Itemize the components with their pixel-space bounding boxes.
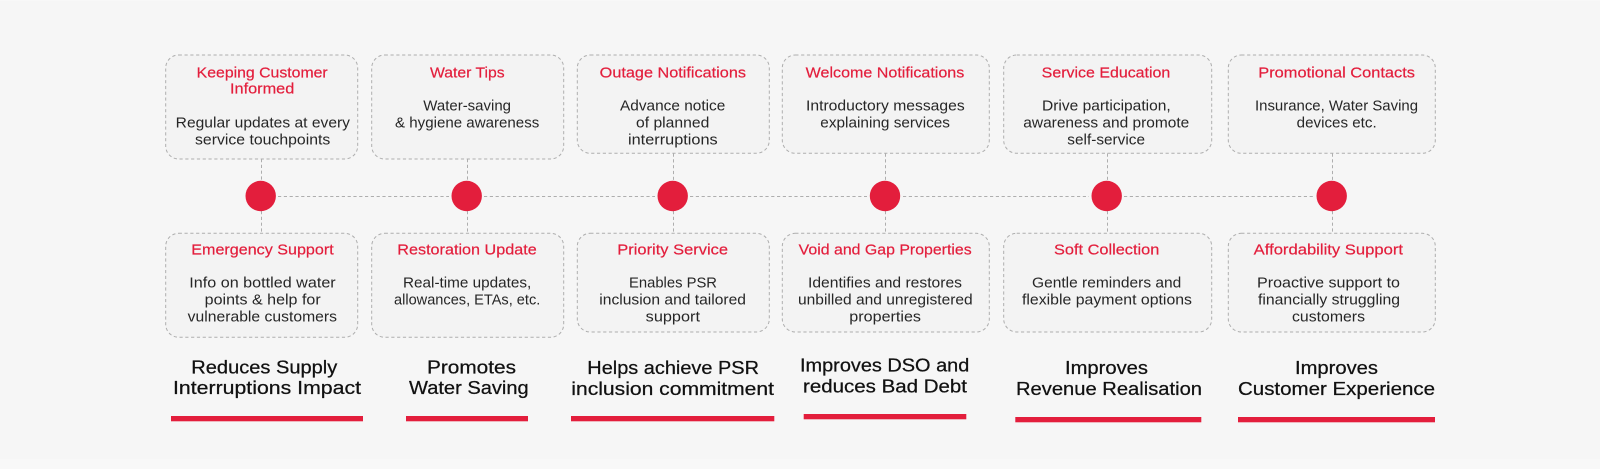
panel: Priority Service: support (646, 310, 700, 326)
panel: Void and Gap Properties: properties (849, 310, 921, 326)
panel: Keeping Customer Informed: Informed (230, 81, 294, 97)
outcome underline (1015, 417, 1201, 422)
panel: Outage Notifications: Advance notice (620, 98, 725, 114)
panel: Service Education: self-service (1067, 132, 1145, 148)
panel: Emergency Support (166, 233, 358, 337)
panel: Emergency Support: vulnerable customers (188, 310, 337, 326)
outcome heading: Interruptions Impact (173, 377, 361, 398)
column 1: Reduces Supply Interruptions Impact (166, 55, 363, 421)
panel: Emergency Support: Info on bottled water (189, 276, 336, 292)
outcome heading: inclusion commitment (571, 378, 774, 399)
panel: Emergency Support: points & help for (205, 293, 321, 309)
panel: Soft Collection: Gentle reminders and (1032, 276, 1181, 292)
outcome underline (1238, 417, 1435, 422)
outcome heading: Promotes (427, 356, 516, 377)
outcome heading (1016, 357, 1202, 399)
outcome heading: Reduces Supply (191, 356, 338, 377)
timeline dots (246, 181, 1347, 211)
panel: Affordability Support (1228, 233, 1435, 332)
panel: Service Education: awareness and promote (1023, 115, 1189, 131)
panel: Keeping Customer Informed: Keeping Customer (197, 65, 328, 81)
panel: Affordability Support: Affordability Support (1254, 242, 1403, 258)
panel: Promotional Contacts (1228, 55, 1435, 153)
panel: Water Tips: Water-saving (423, 98, 511, 114)
column 5: Improves Revenue Realisation (1004, 55, 1212, 422)
panel: Affordability Support: financially struggling (1258, 293, 1400, 309)
panel: Keeping Customer Informed: Regular updates at every (176, 115, 351, 131)
column 4: Improves DSO and reduces Bad Debt (782, 55, 989, 419)
outcome underline (571, 416, 774, 421)
panel: Outage Notifications: of planned (636, 115, 709, 131)
outcome heading: Revenue Realisation (1016, 378, 1202, 399)
panel: Service Education (1004, 55, 1212, 153)
panel: Soft Collection: flexible payment options (1022, 293, 1192, 309)
panel: Void and Gap Properties: unbilled and unregistered (798, 293, 973, 309)
outcome underline (804, 414, 966, 419)
panel: Welcome Notifications: Introductory messages (806, 98, 965, 114)
panel: Emergency Support: Emergency Support (191, 242, 334, 258)
outcome underline (171, 416, 363, 421)
outcome heading (173, 356, 361, 398)
panel: Affordability Support: Proactive support to (1257, 276, 1400, 292)
panel: Keeping Customer Informed: service touchpoints (195, 132, 330, 148)
panel: Restoration Update (372, 233, 564, 337)
panel: Restoration Update: allowances, ETAs, etc. (394, 293, 540, 309)
panel: Promotional Contacts: Insurance, Water Saving (1255, 98, 1418, 114)
panel: Soft Collection: Soft Collection (1054, 242, 1159, 258)
panel: Restoration Update: Real-time updates, (403, 276, 531, 292)
outcome heading: Water Saving (409, 377, 529, 398)
panel: Soft Collection (1004, 233, 1212, 332)
panel: Welcome Notifications: explaining services (820, 115, 950, 131)
outcome heading: Customer Experience (1238, 378, 1435, 399)
outcome heading (1238, 357, 1435, 399)
panel: Void and Gap Properties: Identifies and restores (808, 276, 962, 292)
column 6: Improves Customer Experience (1228, 55, 1435, 422)
panel: Affordability Support: customers (1292, 310, 1365, 326)
panel: Service Education: Service Education (1042, 65, 1170, 81)
panel: Priority Service (577, 233, 769, 332)
panel: Keeping Customer Informed (166, 55, 358, 159)
panel: Priority Service: Enables PSR (629, 276, 717, 292)
panel: Void and Gap Properties: Void and Gap Properties (799, 242, 972, 258)
outcome heading (800, 355, 969, 396)
panel: Welcome Notifications (782, 55, 989, 153)
outcome heading: Helps achieve PSR (587, 357, 759, 378)
panel: Water Tips: & hygiene awareness (395, 115, 539, 131)
panel: Void and Gap Properties (782, 233, 989, 332)
outcome underline (406, 416, 528, 421)
panel: Promotional Contacts: devices etc. (1297, 115, 1377, 131)
outcome heading (409, 356, 529, 398)
panel: Water Tips (372, 55, 564, 159)
outcome heading: Improves (1295, 357, 1378, 378)
column 2: Promotes Water Saving (372, 55, 564, 421)
panel: Service Education: Drive participation, (1042, 98, 1171, 114)
panel: Outage Notifications: Outage Notifications (600, 65, 746, 81)
panel: Outage Notifications (577, 55, 769, 153)
panel: Priority Service: inclusion and tailored (599, 293, 746, 309)
panel: Water Tips: Water Tips (430, 65, 505, 81)
panel: Welcome Notifications: Welcome Notifications (806, 65, 964, 81)
outcome heading: Improves DSO and (800, 355, 969, 376)
panel: Priority Service: Priority Service (617, 242, 728, 258)
outcome heading: reduces Bad Debt (803, 375, 967, 396)
panel: Restoration Update: Restoration Update (397, 242, 537, 258)
outcome heading (571, 357, 774, 399)
outcome heading: Improves (1065, 357, 1148, 378)
timeline connectors (262, 154, 1332, 233)
panel: Outage Notifications: interruptions (628, 132, 718, 148)
panel: Promotional Contacts: Promotional Contacts (1258, 65, 1415, 81)
column 3: Helps achieve PSR inclusion commitment (571, 55, 774, 421)
